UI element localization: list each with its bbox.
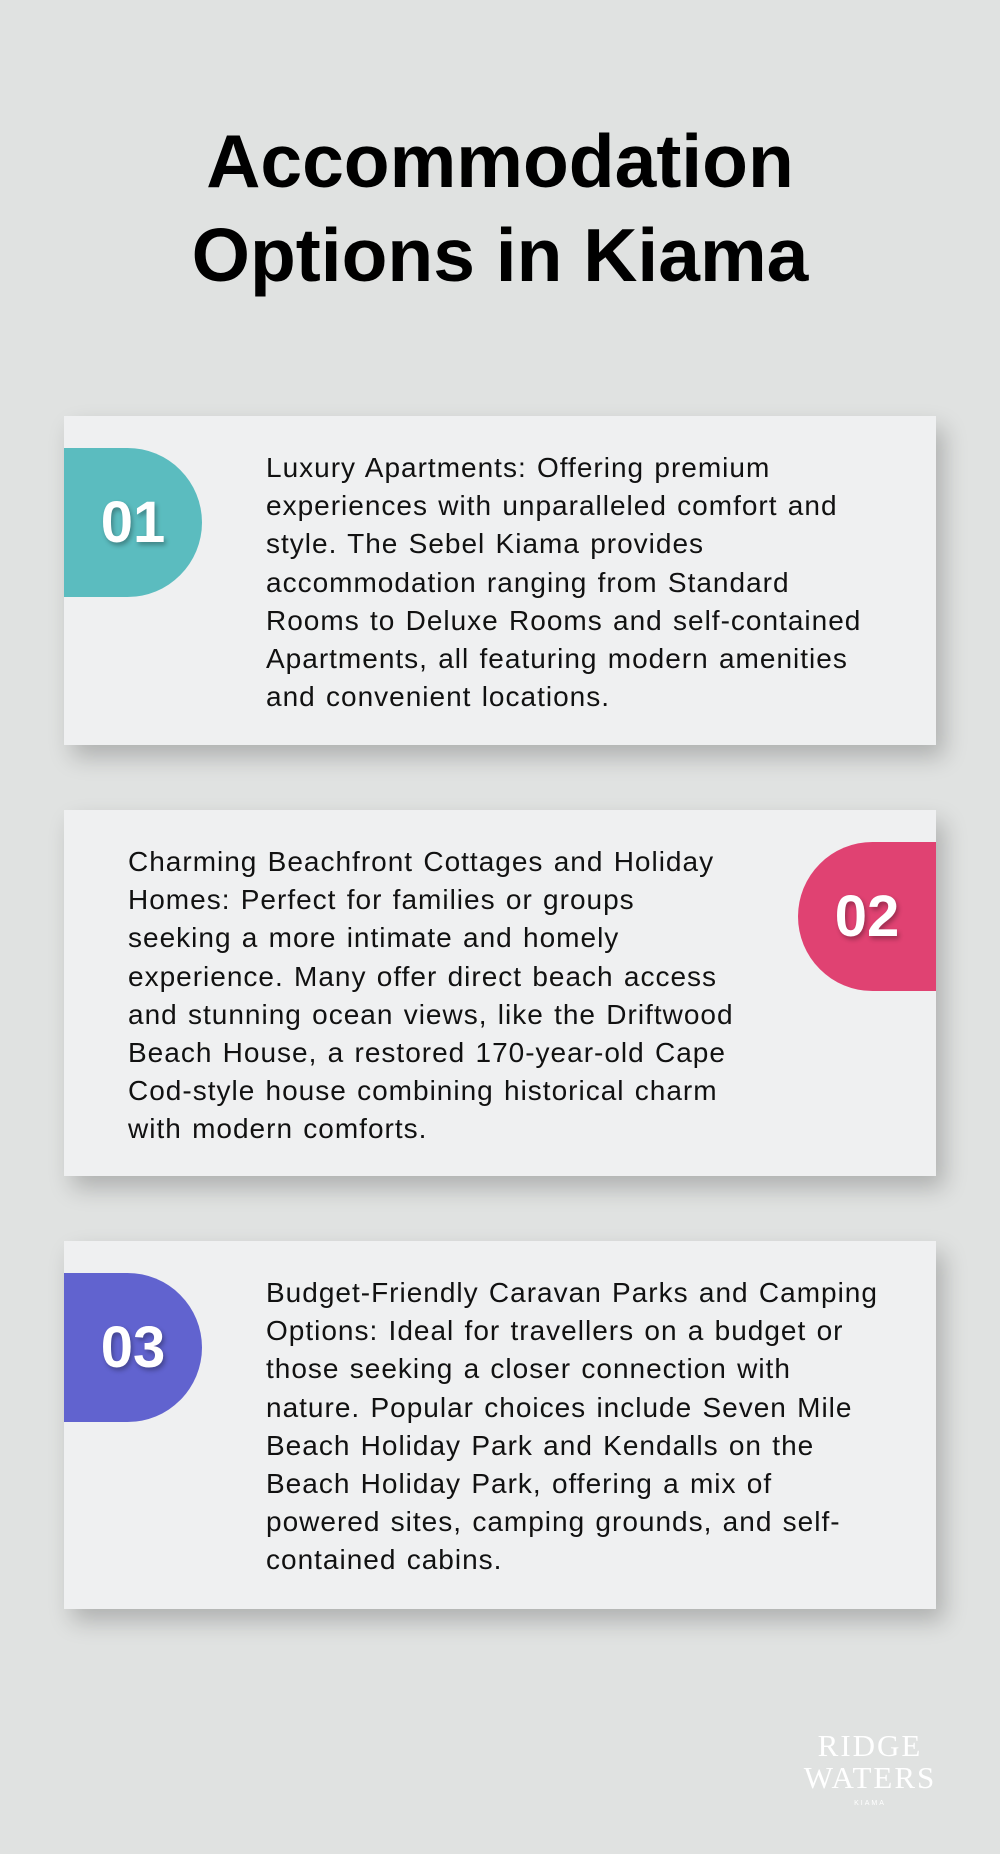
panel: caravan parks xyxy=(64,1241,936,1609)
text: luxury apartments: Luxury Apartments: Offering premium xyxy=(266,452,770,483)
logo: RIDGE xyxy=(818,1728,922,1763)
text: beachfront cottages: Homes: Perfect for families or groups xyxy=(128,884,635,915)
title xyxy=(192,119,809,297)
text: beachfront cottages: with modern comforts. xyxy=(128,1113,427,1144)
logo xyxy=(804,1728,936,1807)
text: caravan parks: Options: Ideal for travellers on a budget or xyxy=(266,1315,843,1346)
text: luxury apartments: Apartments, all featuring modern amenities xyxy=(266,643,848,674)
text: caravan parks: nature. Popular choices include Seven Mile xyxy=(266,1392,852,1423)
text: caravan parks xyxy=(266,1277,878,1575)
title: Options in Kiama xyxy=(192,213,808,297)
badge 01: 01 xyxy=(101,490,165,555)
text: luxury apartments: Rooms to Deluxe Rooms and self-contained xyxy=(266,605,861,636)
badge 03 xyxy=(64,1273,202,1422)
text: beachfront cottages xyxy=(128,846,734,1144)
text: caravan parks: Beach Holiday Park and Kendalls on the xyxy=(266,1430,814,1461)
logo: WATERS xyxy=(804,1760,936,1795)
text: beachfront cottages: Charming Beachfront Cottages and Holiday xyxy=(128,846,714,877)
text: caravan parks: contained cabins. xyxy=(266,1544,502,1575)
text: luxury apartments: experiences with unparalleled comfort and xyxy=(266,490,838,521)
text: beachfront cottages: and stunning ocean views, like the Driftwood xyxy=(128,999,734,1030)
text: beachfront cottages: Cod-style house combining historical charm xyxy=(128,1075,718,1106)
badge 02 xyxy=(798,842,936,991)
badge 02: 02 xyxy=(835,884,899,949)
text: luxury apartments: style. The Sebel Kiama provides xyxy=(266,528,704,559)
text: beachfront cottages: seeking a more intimate and homely xyxy=(128,922,619,953)
badge 01 xyxy=(64,448,202,597)
text: luxury apartments xyxy=(266,452,861,712)
text: caravan parks: those seeking a closer connection with xyxy=(266,1353,791,1384)
badge 03: 03 xyxy=(101,1315,165,1380)
text: beachfront cottages: Beach House, a restored 170-year-old Cape xyxy=(128,1037,726,1068)
panel: luxury apartments xyxy=(64,416,936,745)
text: luxury apartments: accommodation ranging from Standard xyxy=(266,567,790,598)
text: caravan parks: Beach Holiday Park, offering a mix of xyxy=(266,1468,772,1499)
title: Accommodation xyxy=(206,119,794,203)
text: beachfront cottages: experience. Many offer direct beach access xyxy=(128,961,717,992)
text: caravan parks: Budget-Friendly Caravan Parks and Camping xyxy=(266,1277,878,1308)
text: luxury apartments: and convenient locations. xyxy=(266,681,610,712)
panel: beachfront cottages xyxy=(64,810,936,1176)
logo: KIAMA xyxy=(854,1800,886,1807)
text: caravan parks: powered sites, camping grounds, and self- xyxy=(266,1506,841,1537)
